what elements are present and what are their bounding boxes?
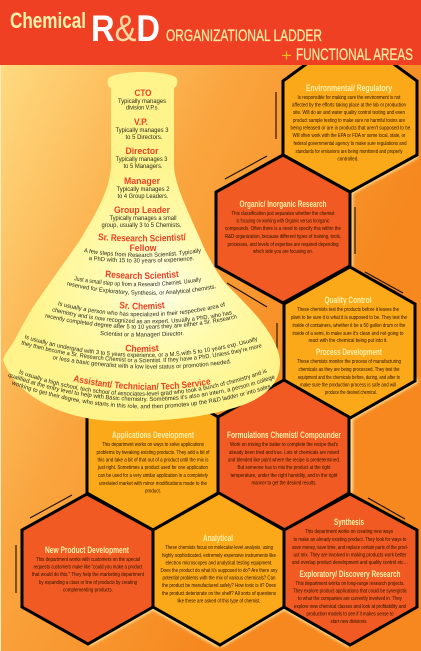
text block: New Product description: that would do this." They help the marketing department — [32, 572, 144, 578]
ladder level: Research Scientist: Just a small step up from a Research Chemist. Usually — [74, 276, 201, 287]
text block: Organic description: is focusing on working with Organic versus Inorganic — [236, 218, 330, 224]
text block: Analytical description — [160, 545, 278, 604]
ladder level: V.P.: V.P. — [134, 117, 148, 128]
text block: Exploratory description: start new divisions. — [330, 619, 368, 625]
ladder level: Sr. Chemist: recently completed degree after 5 to 10 years they are either a Sr. Research — [45, 314, 237, 330]
ladder level: Director: Director — [126, 146, 159, 157]
text block: Exploratory description — [293, 581, 407, 625]
text block: Analytical description: highly sophisticated, extremely expensive instruments like — [162, 553, 276, 559]
ladder level: Group Leader: Typically manages a small — [110, 216, 176, 222]
heading: Process Development: Process Development — [316, 347, 382, 357]
title: Chemical: Chemical — [10, 8, 86, 33]
text block: New Product description: This department works with customers on the special — [36, 557, 140, 563]
text block: Analytical description: potential problems with the mix of various chemicals? Can — [162, 576, 276, 582]
text block: Formulations description: already been tried and true. Lots of chemicals are mixed — [229, 450, 339, 456]
ladder level: V.P.: to 5 Directors. — [126, 135, 163, 141]
text block: Applications description: this and take a bit of that out of a product until the mix is — [98, 458, 209, 464]
ladder level: Director: to 5 Managers. — [124, 164, 163, 170]
ladder level: CTO: CTO — [134, 88, 152, 99]
panel: Environmental / Regulatory hexagon — [283, 32, 417, 192]
ladder level: CTO: Typically manages — [118, 99, 166, 105]
panel: Quality Control and Process Development hexagon — [284, 267, 415, 418]
text block: Applications description: This department works on ways to solve applications — [102, 442, 204, 448]
text block: Analytical description: like these are asked of this type of chemist. — [178, 598, 261, 604]
ladder level: Manager: Manager — [124, 176, 160, 187]
text block: Process Development description — [297, 359, 401, 396]
heading: Synthesis: Synthesis — [334, 517, 364, 527]
heading: Organic/ Inorganic Research: Organic/ Inorganic Research — [240, 199, 326, 209]
ladder level: Sr. Research Scientist / Fellow — [84, 233, 201, 264]
ladder level: CTO: division V.P.s. — [126, 106, 159, 112]
flask: organizational ladder — [3, 72, 280, 422]
text block: Analytical description: the product be manufactured safely? How toxic is it? Does — [162, 583, 276, 589]
ladder level: Manager: Typically manages 2 — [116, 187, 170, 193]
text block: Applications description: can be used for a very similar application in a completely — [98, 473, 208, 479]
ladder level: Chemist: Is usually an undergrad with 3 to 5 years experience, or a M.S.with 5 to 10 years exp. Usually — [24, 334, 257, 358]
ladder level: Research Scientist: Research Scientist — [106, 270, 179, 279]
heading: Environmental/ Regulatory: Environmental/ Regulatory — [306, 83, 392, 93]
heading: Applications Development: Applications Development — [112, 430, 194, 440]
text block: Quality Control description — [291, 307, 407, 344]
ladder level: Manager — [116, 176, 170, 200]
ladder level: Director — [116, 146, 168, 170]
panel: Applications Development hexagon — [87, 380, 218, 530]
ladder level: Chemist: Chemist — [126, 344, 159, 352]
text block: Exploratory description: production models to see if it makes sense to — [306, 612, 394, 618]
panel: Analytical hexagon — [153, 493, 284, 645]
ladder level: Sr. Chemist: Scientist or a Manager/ Director. — [100, 331, 184, 338]
text block: New Product description: requests customers make like "could you make a product — [34, 564, 143, 570]
panel: New Product Development hexagon — [22, 494, 153, 644]
heading: Analytical: Analytical — [203, 533, 233, 543]
panel: Synthesis and Exploratory / Discovery Research hexagon — [284, 494, 417, 645]
ladder level: Assistant / Technician / Tech Service: Is usually a high school, tech school of associates-level grad who took a bunch of chemistry and is — [19, 369, 267, 396]
ladder level: Chemist: they then become a Sr. Research Chemist or a Scientist. If they have a PhD. Unless they're more — [22, 340, 262, 363]
ladder level: V.P. — [116, 117, 169, 141]
title: R&D: R&D — [91, 8, 160, 49]
ladder level: Research Scientist: reserved for Exploratory, Synthesis, or Analytical chemists. — [67, 282, 216, 296]
ladder level: Sr. Chemist: chemistry and is now recognized as an expert. Usually a PhD, who has — [52, 308, 232, 324]
ladder level: Chemist — [22, 334, 262, 370]
text block: Applications description: product. — [145, 488, 161, 494]
plus sign: + — [281, 46, 292, 65]
panel: Formulations Chemist / Compounder hexagon — [218, 380, 349, 530]
text block: Analytical description: Does the product do what it's supposed to do? Are there any — [160, 568, 278, 574]
text block: Formulations description — [228, 442, 340, 486]
heading: Quality Control: Quality Control — [324, 295, 372, 305]
text block: Process Development description: produce the desired chemical. — [325, 390, 377, 396]
text block: Analytical description: These chemists focus on molecular-level analysis, using — [165, 545, 273, 551]
ladder level: Research Scientist — [67, 270, 216, 296]
text block: Organic description: which side you are focusing on. — [252, 249, 313, 255]
text block: Environmental description: controlled. — [338, 156, 359, 162]
ladder level: Group Leader — [102, 205, 182, 229]
text block: Quality Control description: react with the chemical being put into it. — [308, 338, 388, 344]
ladder level: Group Leader: Group Leader — [114, 205, 170, 216]
ladder level: Sr. Research Scientist / Fellow: Fellow — [130, 243, 157, 254]
text block: Organic description — [225, 211, 341, 255]
text block: Applications description: just right. Sometimes a product used for one application — [97, 465, 208, 471]
heading: New Product Development: New Product Development — [45, 545, 129, 555]
text block: Applications description — [96, 442, 210, 494]
header banner — [0, 0, 421, 65]
text block: Formulations description: and blended like paint where the recipe is predetermined. — [228, 458, 340, 464]
ladder level: Sr. Chemist: Is usually a person who has specialized in their respective area of — [58, 301, 225, 318]
text block: Organic description: processes, and levels of expertise are required depending — [228, 242, 338, 248]
ladder level: Assistant / Technician / Tech Service: working to get their degree, who starts in this role, and then promotes up the R&D ladder or into sales. — [12, 381, 272, 409]
text block: Environmental description — [290, 95, 412, 162]
title: Organizational Ladder: ORGANIZATIONAL LADDER — [166, 26, 322, 45]
text block: Process Development description: make sure the production process is safe and will — [300, 382, 396, 388]
ladder level: Chemist: or less a basic generalist with a low level status or promotion needed. — [52, 356, 232, 370]
text block: Organic description: compounds. Often there is a need to specify this within the — [225, 226, 341, 232]
ladder level: Sr. Chemist: Sr. Chemist — [120, 302, 165, 310]
ladder level: Assistant / Technician / Tech Service: Assistant/ Technician/ Tech Service — [73, 375, 210, 390]
text block: Applications description: problems by tweaking existing products. They add a bit of — [96, 450, 210, 456]
text block: Formulations description: Work on mixing the batter to complete the recipe that's — [230, 442, 338, 448]
text block: Organic description: This classification just separates whether the chemist — [232, 211, 335, 217]
text block: Analytical description: the product deteriorate on the shelf? All sorts of questions — [162, 591, 276, 597]
ladder level: Manager: to 4 Group Leaders. — [118, 194, 169, 200]
ladder level: Sr. Chemist — [45, 301, 237, 338]
text block: New Product description: by expanding a class or line of products by creating — [39, 580, 137, 586]
text block: Applications description: unrelated market with minor modifications made to the — [99, 481, 207, 487]
text block: Synthesis description: This department works on creating new ways — [305, 529, 393, 535]
ladder level: CTO — [118, 88, 166, 112]
text block: Formulations description: temperature, under the right humidity, and in the right — [230, 473, 338, 479]
ladder level: Sr. Research Scientist / Fellow: Sr. Research Scientist/ — [98, 233, 186, 242]
ladder level: Assistant / Technician / Tech Service: qualified at the entry level to help with Basic chemistry. Sometimes it's also an intern, a person in college — [8, 374, 275, 402]
text block: Formulations description: manner to get the desired results. — [252, 480, 317, 486]
text block: Synthesis description — [292, 529, 408, 566]
panel: Organic / Inorganic Research hexagon — [216, 155, 350, 303]
ladder level: Director: Typically manages 3 — [116, 157, 168, 163]
text block: Organic description: R&D organization, because different types of training, tools, — [225, 234, 341, 240]
text block: New Product description: complementing products. — [63, 588, 113, 594]
soft glow edges of empty hexagons — [88, 155, 417, 645]
text block: New Product description — [32, 557, 144, 594]
text block: Formulations description: But someone has to mix the product at the right — [238, 465, 331, 471]
heading: Formulations Chemist/ Compounder: Formulations Chemist/ Compounder — [227, 430, 341, 440]
ladder level: Group Leader: group, usually 3 to 5 Chemists. — [102, 223, 182, 229]
ladder level: Sr. Research Scientist / Fellow: a PhD with 15 to 30 years of experience. — [88, 256, 194, 264]
ladder level: Sr. Research Scientist / Fellow: A few steps from Research Scientist. Typically — [84, 248, 201, 258]
ladder level: V.P.: Typically manages 3 — [116, 128, 169, 134]
text block: Analytical description: electron microscopes and analytical testing equipment. — [166, 560, 273, 566]
